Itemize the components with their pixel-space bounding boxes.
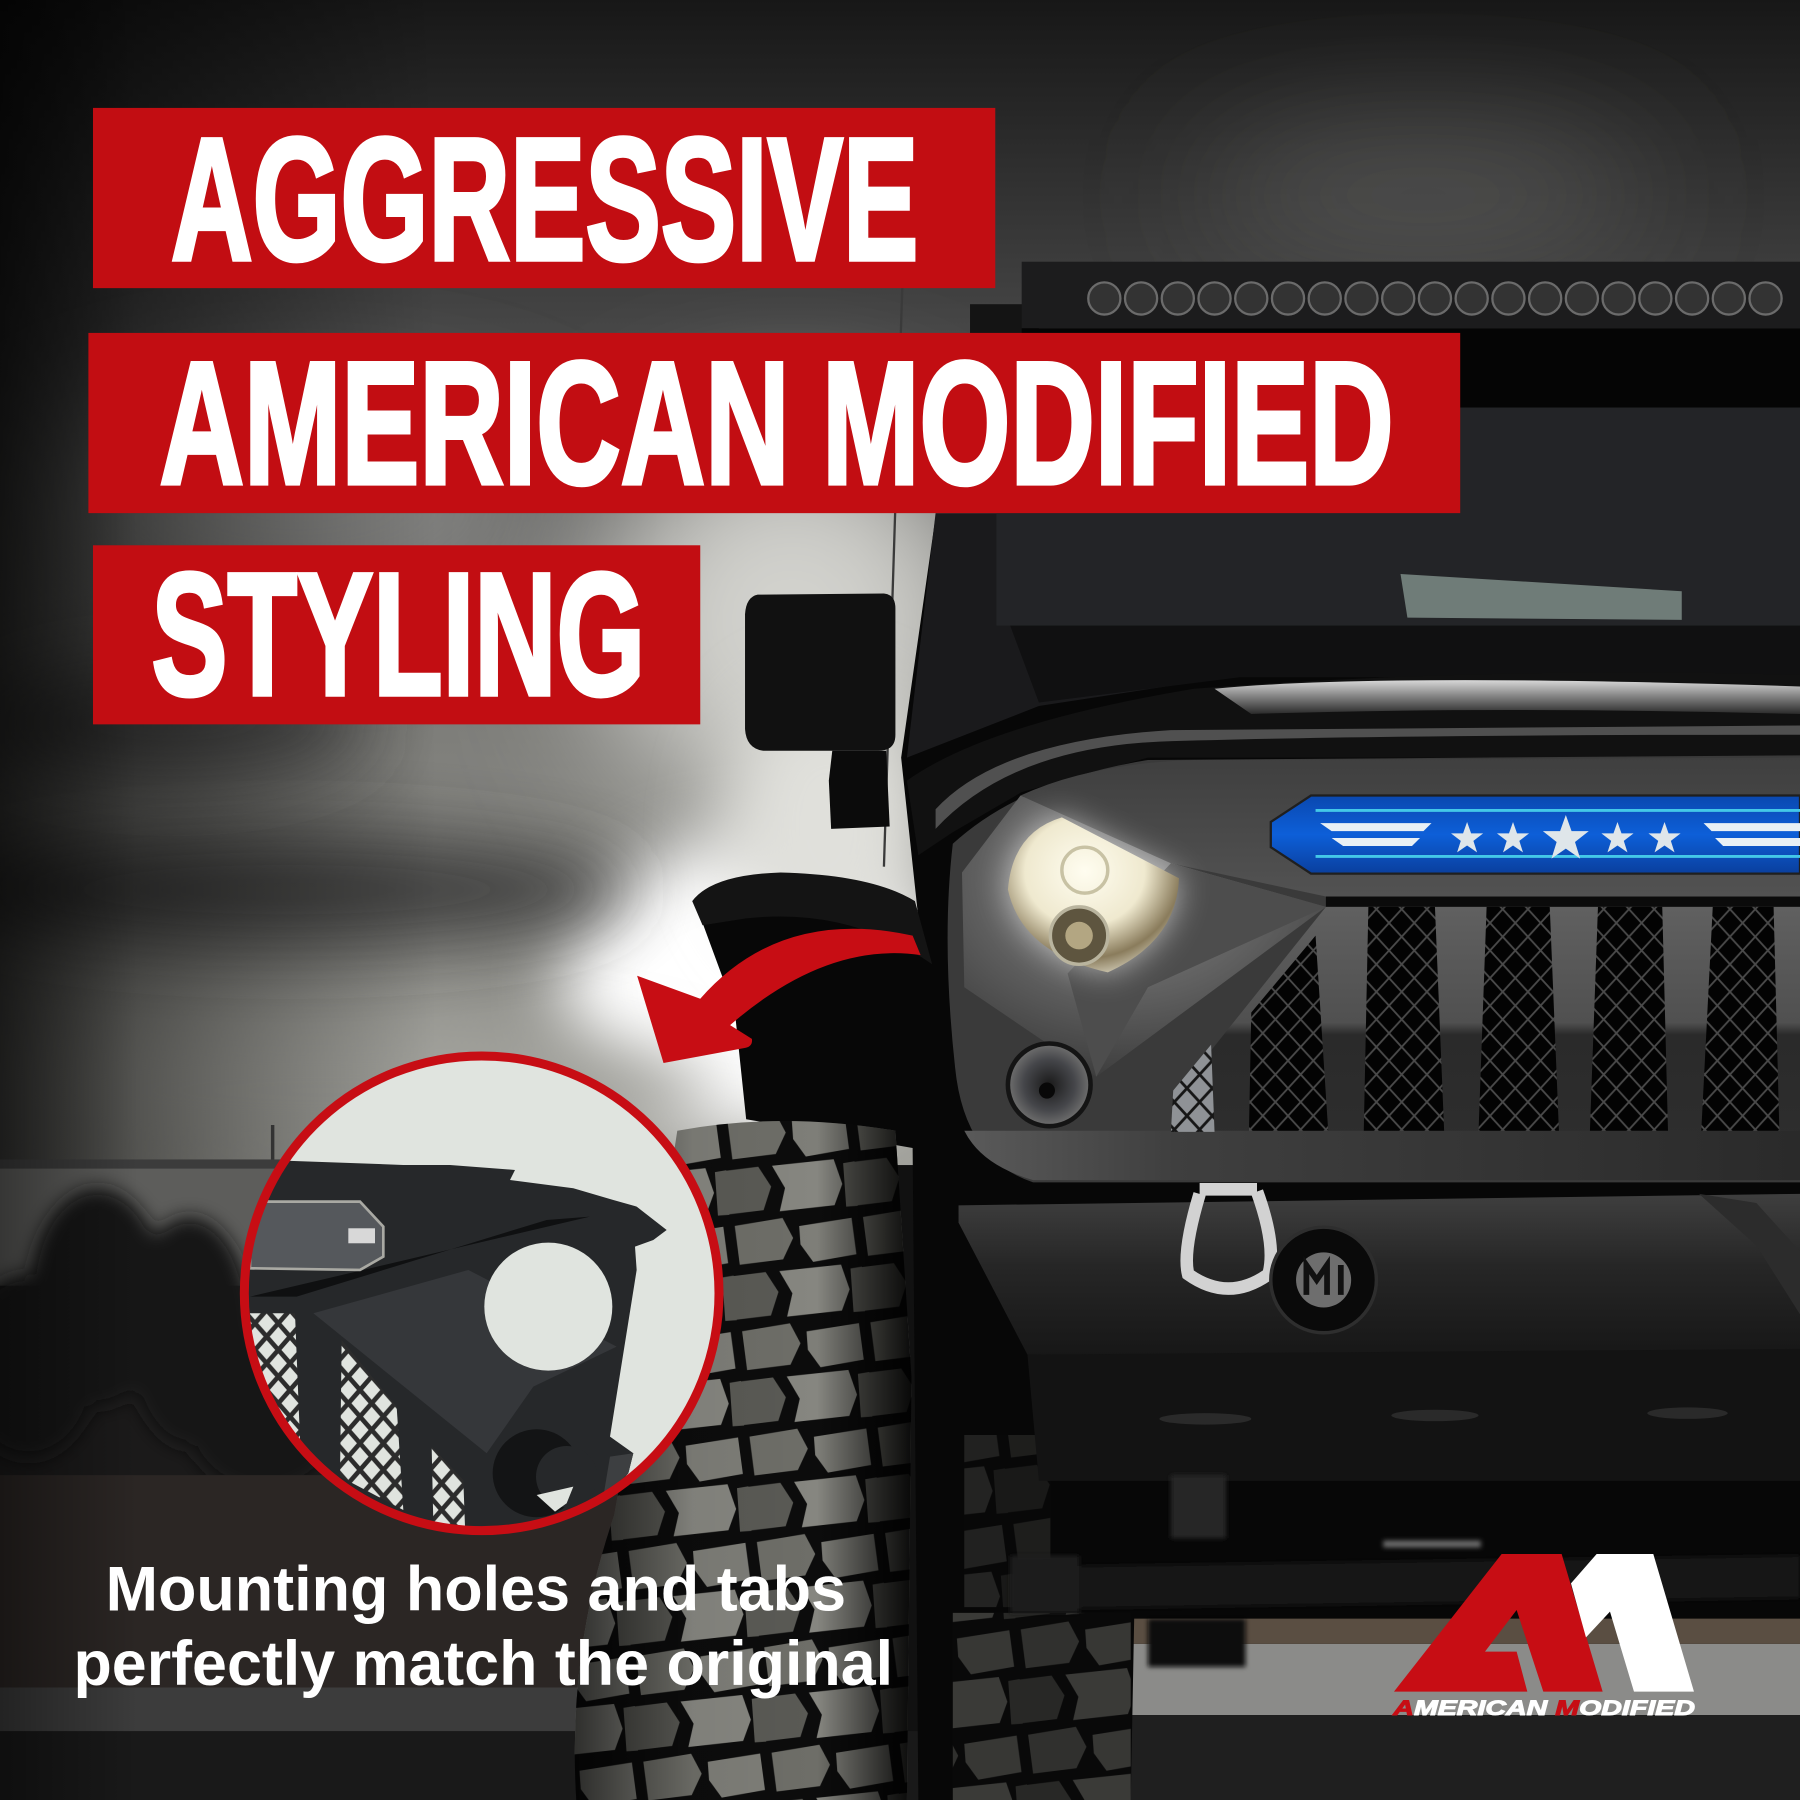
grille product shape — [240, 1161, 667, 1537]
title banner: STYLING: STYLING — [152, 537, 645, 732]
inset circle: grille mounting detail — [240, 1056, 719, 1537]
D-ring shackle — [1187, 1189, 1271, 1289]
main tire with tread — [575, 1121, 911, 1800]
side mirror — [745, 593, 895, 829]
caption text — [73, 1555, 893, 1699]
logo red A — [1394, 1554, 1603, 1692]
caption text: perfectly match the original — [73, 1629, 893, 1699]
title banner: STYLING — [93, 537, 700, 732]
headlight — [1008, 817, 1179, 972]
bumper fog light — [1271, 1227, 1376, 1333]
red curved arrow — [637, 929, 921, 1063]
background: stormy sky — [0, 0, 1800, 1165]
hood — [907, 672, 1800, 855]
front bumper — [959, 1194, 1800, 1481]
logo white stroke — [1571, 1554, 1694, 1692]
title banner: AGGRESSIVE: AGGRESSIVE — [171, 101, 918, 296]
axle and suspension — [1010, 1475, 1800, 1667]
logo wordmark: AMERICAN MODIFIED — [1392, 1696, 1695, 1720]
logo: American Modified — [1392, 1554, 1695, 1720]
light bar on roof — [970, 262, 1800, 409]
grille housing — [948, 755, 1800, 1182]
caption text: Mounting holes and tabs — [106, 1555, 846, 1625]
antenna — [884, 287, 902, 867]
blue LED light bar with stars — [1271, 796, 1800, 874]
grille mesh panels — [1171, 907, 1779, 1132]
title banner: AGGRESSIVE — [93, 101, 995, 296]
fender flare — [692, 872, 932, 964]
jeep body dark mass — [695, 517, 1800, 1800]
windshield — [907, 408, 1800, 758]
winch detail — [1699, 1194, 1800, 1314]
fog light — [1006, 1041, 1093, 1128]
